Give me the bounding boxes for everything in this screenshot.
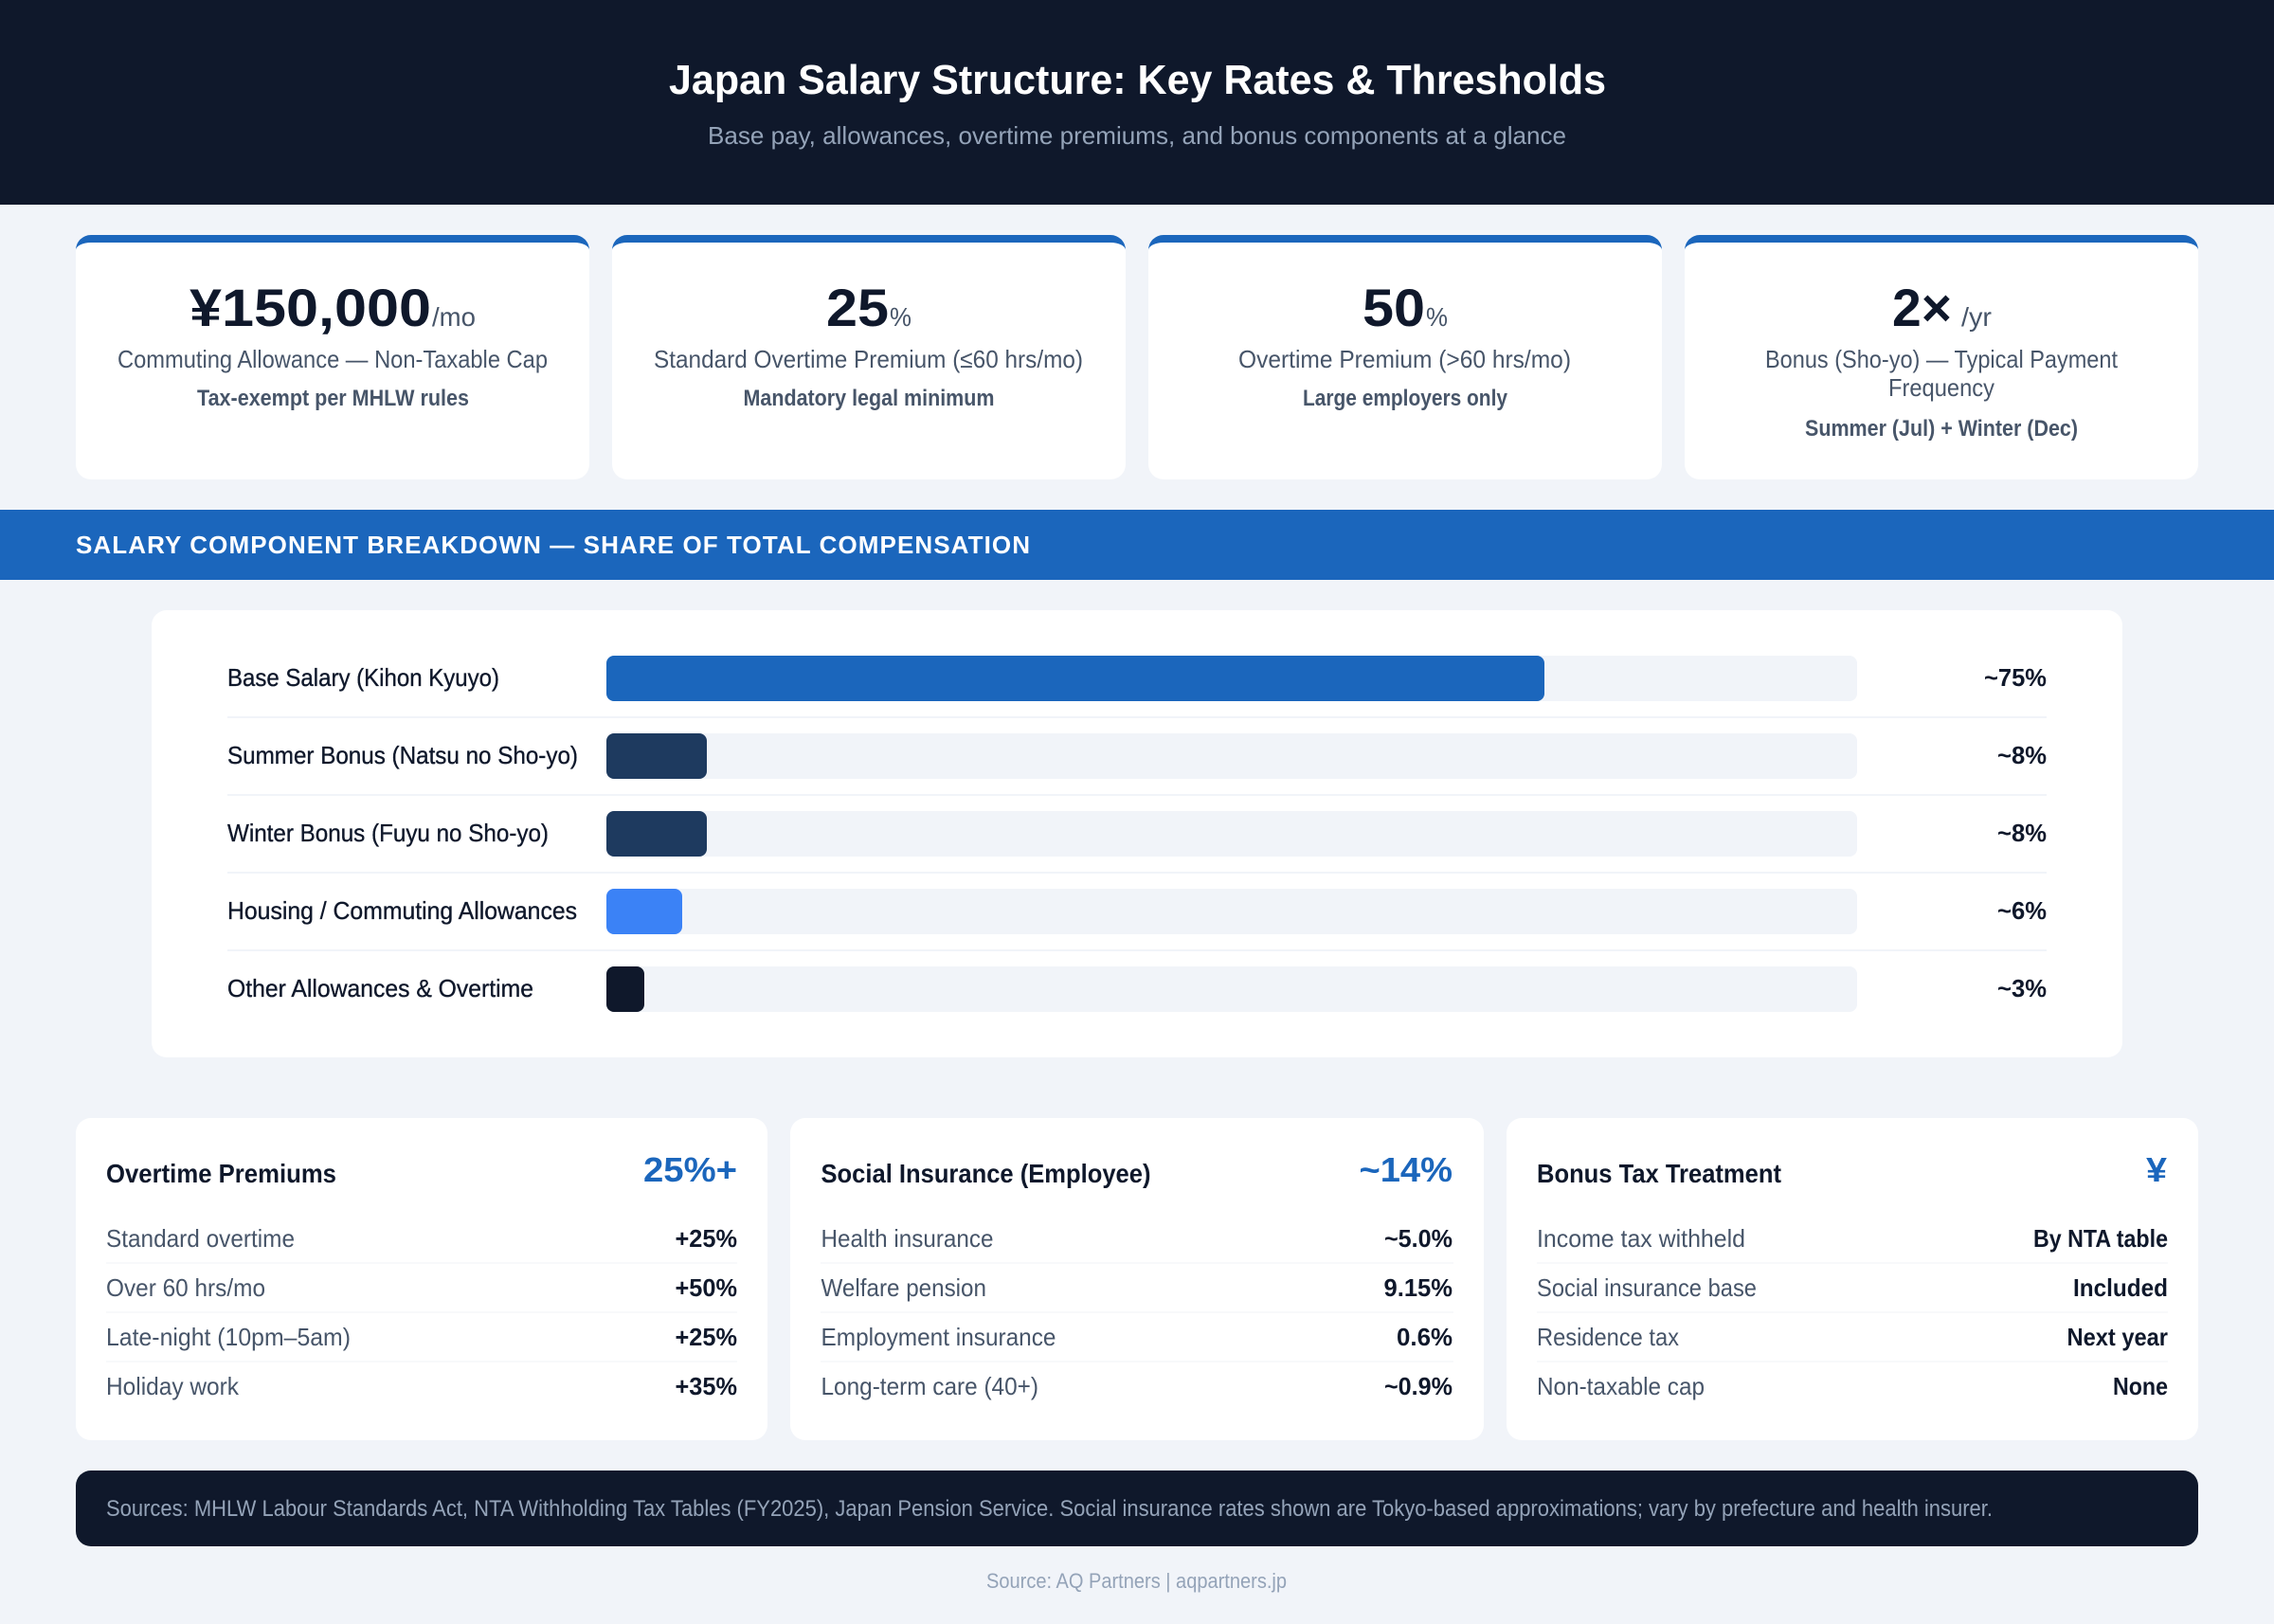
row: employment insurance: Employment insurance [821, 1323, 1056, 1351]
stat unit: /yr [1961, 302, 1992, 332]
row: holiday work [106, 1372, 737, 1400]
card heading: Social Insurance (Employee) [821, 1159, 1150, 1188]
row: standard overtime: +25% [675, 1224, 737, 1253]
bar row: base salary [227, 656, 2047, 701]
row: long-term care [821, 1372, 1453, 1400]
row: welfare pension [821, 1273, 1453, 1302]
row: health insurance [821, 1224, 1453, 1253]
row: social insurance base: Social insurance base [1537, 1273, 1757, 1302]
panel: stat card overtime over 60 [1148, 235, 1662, 479]
row: social insurance base: Included [2073, 1273, 2168, 1302]
card headline symbol: ¥ [2146, 1150, 2167, 1189]
panel: bar chart [152, 610, 2122, 1057]
stat value: 50 [1363, 278, 1425, 337]
bar row: other allowances: Other Allowances & Overtime [227, 974, 533, 1002]
stat label: Commuting Allowance — Non-Taxable Cap [117, 345, 548, 373]
row: non-taxable cap: None [2113, 1372, 2168, 1400]
bar row: other allowances [227, 966, 2047, 1012]
stat label: Bonus (Sho-yo) — Typical Payment [1765, 345, 2119, 373]
bar row: housing and commuting: ~6% [1997, 896, 2047, 925]
panel: stat card bonus frequency [1685, 235, 2198, 479]
row: income tax: By NTA table [2033, 1224, 2168, 1253]
bar row: summer bonus: Summer Bonus (Natsu no Sho-yo) [227, 741, 578, 769]
panel: bonus tax treatment [1507, 1118, 2198, 1440]
section banner [0, 510, 2274, 580]
panel: stat card standard overtime [612, 235, 1126, 479]
stat note: Large employers only [1303, 386, 1508, 411]
row: over 60 hours [106, 1273, 737, 1302]
bar row: summer bonus [227, 733, 2047, 779]
row: holiday work: Holiday work [106, 1372, 240, 1400]
row: long-term care: ~0.9% [1384, 1372, 1453, 1400]
card heading: Overtime Premiums [106, 1159, 336, 1188]
card heading: Bonus Tax Treatment [1537, 1159, 1781, 1188]
row: over 60 hours: Over 60 hrs/mo [106, 1273, 265, 1302]
bar row: winter bonus [227, 811, 2047, 857]
header band [0, 0, 2274, 205]
stat label: Frequency [1888, 373, 1994, 402]
source credit: Source: AQ Partners | aqpartners.jp [986, 1569, 1287, 1593]
stat label [1765, 345, 2119, 402]
bar row: summer bonus: ~8% [1997, 741, 2047, 769]
bar row: housing and commuting [227, 889, 2047, 934]
row: health insurance: ~5.0% [1384, 1224, 1453, 1253]
stat value: ¥150,000 [190, 278, 431, 337]
row: employment insurance: 0.6% [1397, 1323, 1453, 1351]
section heading: SALARY COMPONENT BREAKDOWN — SHARE OF TOTAL COMPENSATION [76, 531, 1030, 559]
panel: stat card commuting allowance [76, 235, 589, 479]
stat value: 25 [826, 278, 889, 337]
row: employment insurance [821, 1323, 1453, 1351]
row: over 60 hours: +50% [675, 1273, 737, 1302]
bar row: winter bonus: ~8% [1997, 819, 2047, 847]
panel: social insurance [790, 1118, 1484, 1440]
card headline value: 25%+ [643, 1150, 737, 1189]
stat label: Overtime Premium (>60 hrs/mo) [1238, 345, 1571, 373]
row: residence tax [1537, 1323, 2168, 1351]
stat unit: /mo [432, 302, 476, 332]
row: social insurance base [1537, 1273, 2168, 1302]
row: late night: +25% [675, 1323, 737, 1351]
bar row: base salary: ~75% [1984, 663, 2047, 692]
row: long-term care: Long-term care (40+) [821, 1372, 1038, 1400]
row: standard overtime: Standard overtime [106, 1224, 295, 1253]
stat note: Mandatory legal minimum [743, 386, 995, 411]
bar row: other allowances: ~3% [1997, 974, 2047, 1002]
row: late night: Late-night (10pm–5am) [106, 1323, 351, 1351]
sources text: Sources: MHLW Labour Standards Act, NTA Withholding Tax Tables (FY2025), Japan Pension Service. Social insurance rates shown are Tokyo-based approximations; vary by prefecture and health insurer. [106, 1496, 1993, 1522]
stat unit: % [1426, 302, 1448, 332]
panel: sources note [76, 1471, 2198, 1546]
card headline value: ~14% [1359, 1150, 1453, 1189]
stat note: Summer (Jul) + Winter (Dec) [1805, 416, 2078, 442]
row: late night [106, 1323, 737, 1351]
stat value: 2× [1892, 278, 1952, 337]
row: residence tax: Residence tax [1537, 1323, 1679, 1351]
bar row: winter bonus: Winter Bonus (Fuyu no Sho-yo) [227, 819, 549, 847]
bar row: housing and commuting: Housing / Commuting Allowances [227, 896, 577, 925]
title: Japan Salary Structure: Key Rates & Thresholds [669, 57, 1606, 103]
row: income tax: Income tax withheld [1537, 1224, 1745, 1253]
stat note: Tax-exempt per MHLW rules [197, 386, 469, 411]
row: income tax [1537, 1224, 2168, 1253]
bar row: base salary: Base Salary (Kihon Kyuyo) [227, 663, 499, 692]
panel: overtime premiums [76, 1118, 767, 1440]
row: health insurance: Health insurance [821, 1224, 993, 1253]
stat unit: % [890, 302, 911, 332]
subtitle: Base pay, allowances, overtime premiums, and bonus components at a glance [708, 121, 1566, 150]
stat label: Standard Overtime Premium (≤60 hrs/mo) [654, 345, 1083, 373]
row: residence tax: Next year [2067, 1323, 2168, 1351]
row: non-taxable cap: Non-taxable cap [1537, 1372, 1705, 1400]
row: welfare pension: Welfare pension [821, 1273, 986, 1302]
row: holiday work: +35% [675, 1372, 737, 1400]
row: standard overtime [106, 1224, 737, 1253]
row: welfare pension: 9.15% [1383, 1273, 1453, 1302]
row: non-taxable cap [1537, 1372, 2168, 1400]
